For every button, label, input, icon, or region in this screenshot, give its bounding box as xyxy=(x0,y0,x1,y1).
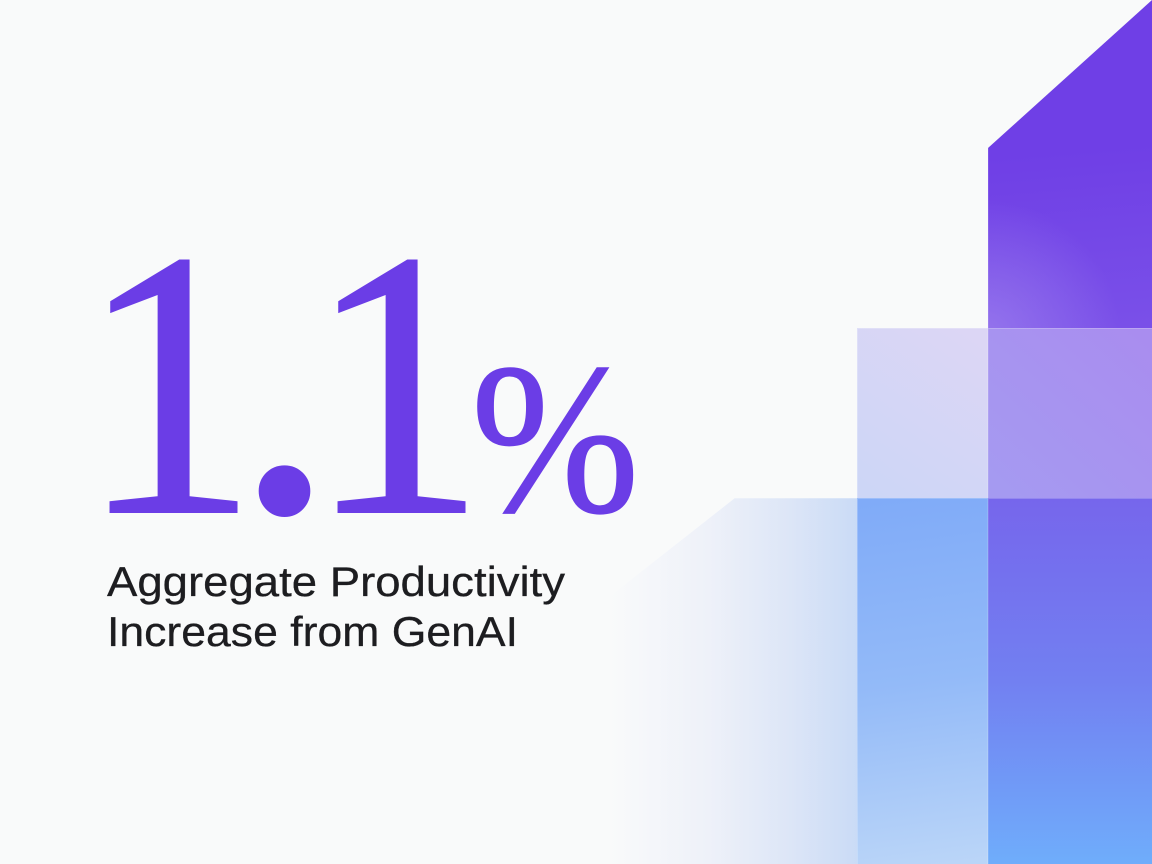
bar: faded lower step xyxy=(590,498,857,864)
stat digits: . xyxy=(232,136,337,601)
bar: tall purple tower xyxy=(988,0,1152,328)
big statistic: 1.1% xyxy=(79,136,639,601)
overlap: blue column left xyxy=(857,498,988,864)
overlap: blue column right xyxy=(988,498,1152,864)
overlap: lavender band left xyxy=(857,328,988,498)
stat digits xyxy=(79,136,486,601)
overlap: lavender band right xyxy=(988,328,1152,498)
stat digits: 1 xyxy=(79,173,258,594)
stat percent sign: % xyxy=(471,320,639,558)
caption line 1: Aggregate Productivity xyxy=(107,558,565,605)
caption line 2: Increase from GenAI xyxy=(107,608,518,655)
stat digits: 1 xyxy=(307,173,486,594)
chart graphic: stepped bars xyxy=(590,0,1152,864)
caption xyxy=(107,558,565,655)
